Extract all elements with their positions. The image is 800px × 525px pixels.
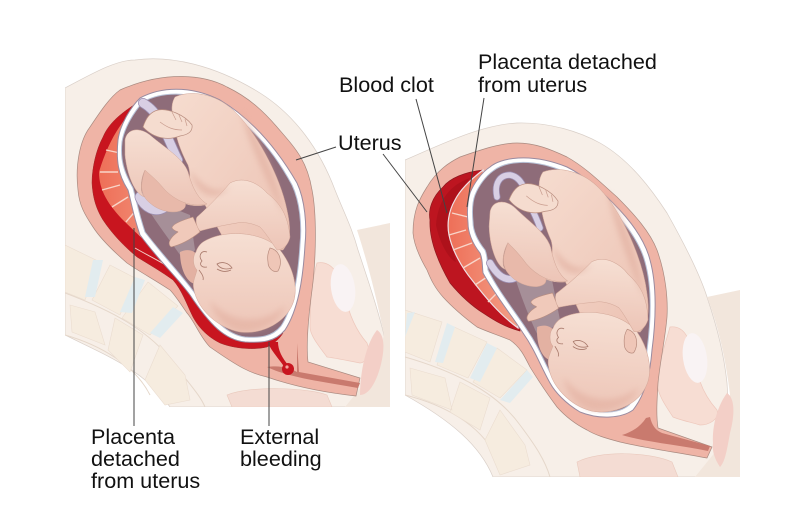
blood clot along wall — [92, 103, 283, 349]
amniotic sac — [467, 158, 655, 417]
umbilical cord — [140, 103, 178, 210]
spine — [65, 245, 205, 407]
label: placenta detached from uterus, right: Placenta detached — [478, 49, 657, 74]
label: placenta detached from uterus, left: Placenta — [91, 424, 175, 449]
bladder and pelvic organs — [310, 263, 383, 395]
label: placenta detached from uterus, left: detached — [91, 446, 180, 471]
spine — [405, 310, 550, 477]
cervix canal — [622, 417, 710, 451]
label: external bleeding: External — [240, 424, 319, 449]
placenta — [448, 170, 518, 328]
leader line: uterus left — [296, 147, 336, 160]
leader line: external bleeding — [268, 342, 270, 426]
maternal body outline — [65, 59, 390, 407]
pubic bone — [577, 454, 678, 477]
pubic bone — [227, 389, 332, 407]
label: uterus: Uterus — [338, 130, 402, 155]
uterus wall — [413, 143, 712, 458]
cervix canal — [267, 343, 360, 388]
leader line: blood clot — [416, 99, 447, 213]
blood drip through cervix — [268, 342, 294, 375]
thigh — [345, 223, 390, 407]
bladder and pelvic organs — [657, 327, 733, 467]
lower sac lighter fluid — [516, 280, 560, 334]
leader line: uterus right — [383, 154, 427, 212]
clot darker area — [436, 178, 470, 262]
fetus — [125, 93, 295, 332]
label: placenta detached from uterus, left: from uterus — [91, 468, 200, 493]
blood clot — [430, 170, 520, 331]
panel: right illustration, concealed bleeding — [405, 123, 740, 477]
umbilical cord — [490, 175, 540, 279]
leader line: right placenta detached — [467, 98, 484, 207]
uterus wall — [77, 76, 360, 396]
fetus — [488, 169, 650, 414]
label: external bleeding: bleeding — [240, 446, 322, 471]
leader line: left placenta detached — [133, 228, 135, 426]
thigh — [695, 290, 740, 477]
infographic: placental abruption illustrations — [65, 54, 740, 488]
placenta — [99, 120, 164, 264]
amniotic sac — [117, 89, 306, 342]
maternal body outline — [405, 123, 733, 477]
lower sac lighter fluid — [152, 211, 195, 254]
panel: left illustration, external bleeding — [65, 59, 390, 407]
label: blood clot: Blood clot — [339, 72, 434, 97]
label: placenta detached from uterus, right: from uterus — [478, 72, 587, 97]
